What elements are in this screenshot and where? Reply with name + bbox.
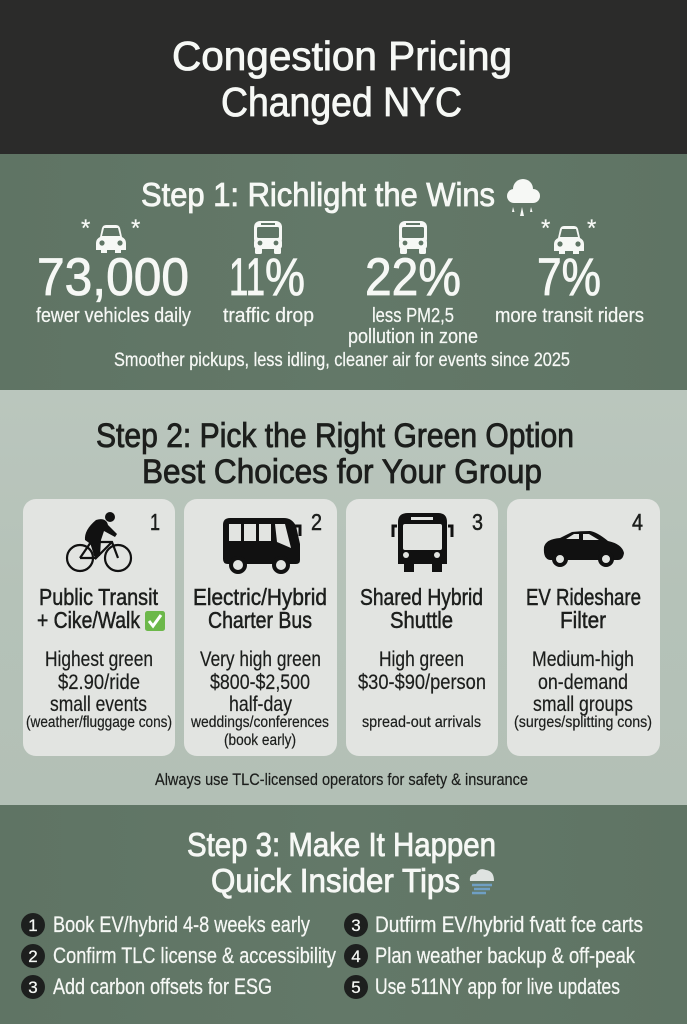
tip list left: 1 [28, 916, 38, 935]
stat: 73,000: * [131, 215, 140, 242]
stat: 11% [223, 221, 314, 327]
card 2: charter bus: (book early) [224, 732, 296, 749]
card 2: charter bus: Electric/Hybrid [193, 584, 327, 610]
tip list left: 2 [28, 947, 38, 966]
card 1: public transit: (weather/fluggage cons) [26, 714, 172, 731]
tip list right: 3 [351, 916, 361, 935]
step 1 heading: Step 1: Richlight the Wins [141, 176, 495, 213]
tip list right: Dutfirm EV/hybrid fvatt fce carts [375, 912, 643, 937]
tip list right: 4 [351, 947, 361, 966]
card 3: shared shuttle: spread-out arrivals [362, 714, 481, 731]
stat: 22% [348, 221, 478, 348]
number 2: 2 [311, 509, 322, 535]
stat: 11%: traffic drop [223, 305, 314, 327]
panel: step 2 options [0, 390, 687, 805]
number 3: 3 [472, 509, 483, 535]
number 1: 1 [150, 509, 160, 535]
card 4: EV rideshare: (surges/splitting cons) [514, 714, 652, 731]
card 2: charter bus: Charter Bus [208, 607, 312, 633]
card 4: EV rideshare [507, 499, 660, 756]
card 4: EV rideshare: on-demand [538, 671, 628, 694]
caption: Smoother pickups, less idling, cleaner air for events since 2025 [114, 350, 570, 371]
step 3 heading: Step 3: Make It Happen [187, 826, 496, 863]
header band [0, 0, 687, 154]
stat: 73,000: * [81, 215, 90, 242]
step 2 heading: Best Choices for Your Group [142, 453, 542, 491]
card 4: EV rideshare: EV Rideshare [526, 584, 641, 610]
stat: 11%: 11 [229, 248, 265, 307]
stat: 7%: more transit riders [495, 305, 644, 327]
card 3: shared shuttle: $30-$90/person [358, 671, 486, 694]
title: Changed NYC [221, 79, 462, 125]
card 4: EV rideshare: small groups [533, 693, 633, 716]
step 3 heading [187, 826, 496, 899]
tip list right: 5 [351, 978, 361, 997]
icon: storm cloud [470, 869, 494, 893]
card 2: charter bus: weddings/conferences [190, 714, 329, 731]
tip list left: Confirm TLC license & accessibility [53, 943, 336, 968]
card 4: EV rideshare: Medium-high [532, 648, 634, 671]
panel: step 1 wins [0, 154, 687, 390]
stat: 7% [495, 215, 644, 327]
icon: shuttle front [393, 513, 452, 572]
tip list right: Use 511NY app for live updates [375, 974, 620, 999]
stat: 7%: * [587, 215, 596, 242]
icon: cyclist [67, 512, 131, 571]
tip list right: Plan weather backup & off-peak [375, 943, 636, 968]
card 3: shared shuttle [346, 499, 498, 756]
stat: 11%: % [265, 248, 305, 307]
stat: 7%: 7% [537, 248, 601, 307]
stat: 73,000: 73,000 [37, 248, 189, 307]
card 1: public transit: Public Transit [39, 584, 159, 610]
number 4: 4 [632, 509, 643, 535]
stat: 22%: 22% [365, 248, 461, 307]
stat: 73,000 [36, 215, 191, 327]
card 1: public transit: small events [50, 693, 147, 716]
stat: 22%: pollution in zone [348, 326, 478, 348]
card 1: public transit [23, 499, 175, 756]
step 2 heading [96, 417, 574, 491]
card 1: public transit: Highest green [45, 648, 153, 671]
icon: green check [145, 611, 165, 631]
card 2: charter bus: Very high green [200, 648, 321, 671]
card 1: public transit: $2.90/ride [58, 671, 140, 694]
card 2: charter bus [184, 499, 337, 756]
icon: rain cloud [507, 179, 540, 216]
card 2: charter bus: half-day [229, 693, 292, 716]
card 2: charter bus: $800-$2,500 [210, 671, 310, 694]
icon: bus [223, 518, 300, 572]
icon: sedan [544, 531, 624, 565]
tip list left [21, 912, 336, 999]
card 3: shared shuttle: Shared Hybrid [360, 584, 483, 610]
title [172, 33, 512, 125]
step 3 heading: Quick Insider Tips [211, 862, 460, 899]
card 1: public transit: + Cike/Walk [37, 607, 140, 633]
stat: 7%: * [541, 215, 550, 242]
panel: step 3 tips [0, 805, 687, 1024]
stat: 22%: less PM2,5 [372, 305, 454, 327]
tip list right [344, 912, 643, 999]
tip list left: 3 [28, 978, 38, 997]
safety note: Always use TLC-licensed operators for safety & insurance [155, 771, 528, 789]
card 3: shared shuttle: High green [379, 648, 464, 671]
card 4: EV rideshare: Filter [560, 607, 606, 633]
card 3: shared shuttle: Shuttle [390, 607, 453, 633]
tip list left: Book EV/hybrid 4-8 weeks early [53, 912, 310, 937]
step 2 heading: Step 2: Pick the Right Green Option [96, 417, 574, 455]
stat: 73,000: fewer vehicles daily [36, 305, 191, 327]
title: Congestion Pricing [172, 33, 512, 79]
tip list left: Add carbon offsets for ESG [53, 974, 272, 999]
